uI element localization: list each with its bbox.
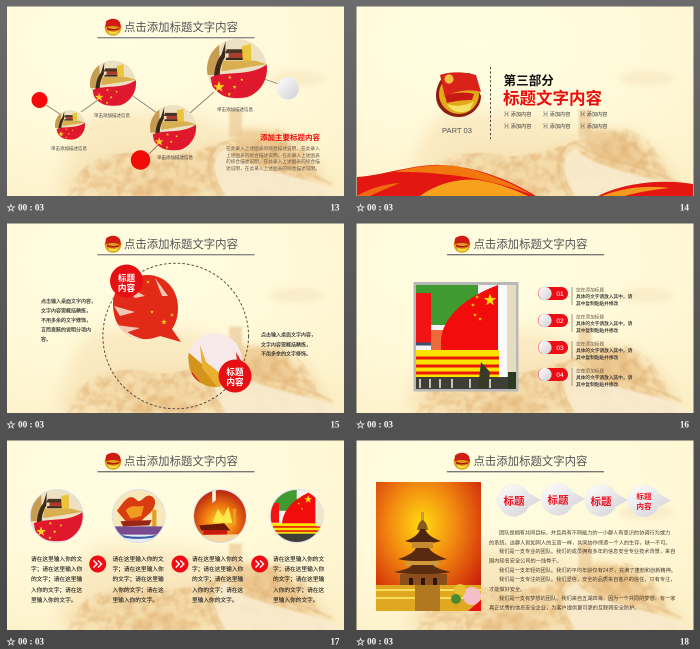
footer slide 16: 00 : 03	[367, 420, 393, 430]
left text block: 点击输入桌面文字内容，	[41, 298, 96, 305]
red badge top: 标题	[118, 272, 135, 283]
bubble 1	[498, 484, 541, 516]
arrow button 3	[251, 556, 268, 572]
toggle item 04: 您在添加标题	[576, 368, 604, 374]
toggle item 01	[538, 286, 633, 307]
footer slide 15: 15	[330, 420, 340, 430]
toggle item 02: 具体的文字请放入其中，请	[576, 320, 633, 327]
toggle item 01: 具体的文字请放入其中，请	[576, 293, 633, 300]
toggle item 04: 其中复制粘贴并修改	[576, 381, 619, 388]
toggle item 01: 其中复制粘贴并修改	[576, 300, 619, 307]
heading: slide 17 title: 点击添加标题文字内容	[124, 454, 238, 468]
step 3 text: 请在这里输入你的文	[192, 555, 243, 563]
step 2 text: 里输入你的文字。	[112, 596, 158, 604]
step 1 text: 请在这里输入你的文	[31, 555, 82, 563]
footer slide 13: 13	[330, 202, 340, 212]
team description text	[489, 528, 676, 612]
body text block: 述说明，在此录入上述图表的综合描述说明。	[226, 165, 320, 172]
body text block: 在此录入上述图表的综合描述说明，在此录入	[226, 145, 320, 152]
body text block: 的综合描述说明，在此录入上述图表的综合描	[226, 158, 320, 165]
heading: slide 18 title	[447, 453, 604, 472]
heading: slide 13 title: 点击添加标题文字内容	[124, 20, 238, 34]
dashed ring	[103, 263, 248, 409]
left text block: 不用多余的文字修饰，	[41, 317, 91, 324]
footer slide 15	[8, 420, 340, 430]
bubble 2: 标题	[548, 494, 569, 506]
ribbon right	[598, 182, 693, 196]
team description text: 的系统，这群人就如同人的五官一样，共同协作缔造一个人的生存，缺一不可。	[489, 538, 671, 546]
caption labels: 单击添加描述信息	[157, 154, 193, 161]
connector lines	[46, 79, 279, 155]
step 2 text	[112, 555, 164, 604]
footer slide 17: 00 : 03	[18, 636, 44, 646]
heading: slide 17 title	[98, 453, 254, 472]
flag photo in pin shape	[113, 275, 181, 342]
photo circle middle left	[90, 60, 137, 106]
bubble 3: 标题	[590, 495, 612, 508]
footer slide 17	[8, 636, 340, 646]
right text block: 文字内容需概括精炼，	[261, 342, 311, 348]
step 4 text: 里输入你的文字。	[273, 596, 318, 604]
step 4 text: 字；请在这里输入你	[273, 565, 324, 573]
step 3 text	[192, 555, 243, 604]
white and gold photo circle	[188, 333, 242, 388]
bubble 4	[628, 485, 671, 517]
section title heading: 标题文字内容	[503, 88, 602, 108]
left text block: 容。	[41, 336, 51, 343]
toggle item 04: 04	[556, 372, 564, 379]
team description text: 我们是一支专业的团队。我们的成员拥有多年的信息安全专业技术背景，来自	[499, 547, 675, 555]
footer slide 13	[8, 202, 340, 212]
toggle item 02: 您在添加标题	[576, 314, 604, 320]
heading: slide 18 title: 点击添加标题文字内容	[474, 454, 587, 468]
left text block: 言简意赅的说明分项内	[41, 326, 91, 334]
panel: slide 16 photo with list	[356, 224, 694, 430]
heading: slide 16 title	[447, 236, 604, 255]
toggle item 04	[538, 368, 633, 388]
photo circle large	[207, 39, 268, 99]
footer slide 14: 14	[680, 202, 689, 212]
footer slide 15: 00 : 03	[18, 420, 44, 430]
toggle item 01: 01	[556, 291, 564, 298]
right text block: 点击输入桌面文字内容，	[261, 332, 316, 338]
toggle item 01: 您在添加标题	[576, 286, 604, 294]
caption labels: 单击添加描述信息	[94, 112, 130, 119]
step 3 text: 的文字；请在这里输	[192, 575, 243, 583]
temple photo	[376, 482, 481, 611]
toggle item 03	[538, 340, 633, 361]
step 3 text: 入你的文字；请在这	[192, 586, 243, 594]
item list: ⌘ 添加内容	[580, 110, 607, 118]
item list: ⌘ 添加内容	[504, 122, 531, 130]
toggle item 03: 03	[556, 345, 564, 352]
heading: slide 15 title	[98, 236, 254, 255]
panel: slide 13 network of circles	[7, 6, 344, 212]
body text block: 上述图表的综合描述说明，在此录入上述图表	[226, 152, 320, 159]
step 2 text: 入你的文字；请在这	[112, 586, 164, 594]
step 1 text	[31, 555, 82, 604]
team description text: 我们是一支有梦想的团队。我们来自五湖四海，因为一个共同的梦想：有一家	[499, 594, 675, 602]
white knob circle	[277, 77, 299, 100]
item list	[504, 110, 607, 130]
red dot bottom	[131, 150, 150, 170]
step 1 text: 里输入你的文字。	[31, 596, 76, 604]
team description text: 团队是拥有共同目标，并且具有不同能力的一小群人有意识的协调行为或力	[499, 528, 670, 536]
footer slide 17: 17	[330, 636, 340, 646]
footer slide 18	[357, 636, 689, 646]
right text block	[261, 332, 316, 358]
toggle item 03: 您在添加标题	[576, 340, 604, 348]
footer slide 14: 00 : 03	[367, 202, 393, 212]
step 2 text: 请在这里输入你的文	[112, 555, 164, 563]
section number heading: 第三部分	[504, 73, 554, 88]
arrow button 1	[89, 556, 106, 572]
step 4 text	[273, 555, 324, 604]
part label: PART 03	[442, 126, 472, 135]
step 1 text: 入你的文字；请在这	[31, 586, 82, 594]
item list: ⌘ 添加内容	[543, 122, 570, 130]
team description text: 国内知名安全公司的一线骨干。	[489, 556, 562, 564]
emblem large	[436, 72, 481, 117]
toggle item 03: 其中复制粘贴并修改	[576, 354, 619, 361]
footer slide 14	[357, 202, 689, 212]
step 1 text: 字；请在这里输入你	[31, 565, 82, 573]
toggle item 03: 具体的文字请放入其中，请	[576, 347, 633, 354]
left text block	[41, 298, 96, 343]
item list: ⌘ 添加内容	[504, 110, 531, 118]
red subheading: 添加主要标题内容	[260, 132, 320, 142]
dashed divider	[490, 67, 492, 139]
team description text: 真正优秀的信息安全企业，为客户提供更可靠的互联网安全防护。	[489, 604, 639, 612]
toggle item 02: 02	[556, 318, 564, 325]
step 2 text: 字；请在这里输入你	[112, 565, 164, 573]
step 3 photo	[193, 489, 247, 543]
red badge bottom: 内容	[226, 376, 244, 387]
red badge top: 内容	[118, 282, 135, 293]
toggle list	[538, 286, 633, 388]
toggle item 02: 其中复制粘贴并修改	[576, 327, 619, 334]
team description text: 才能做好安全。	[489, 585, 525, 593]
framed flag photo	[414, 282, 518, 392]
caption labels	[51, 106, 253, 161]
bubble 4: 标题	[636, 491, 652, 501]
red badge bottom: 标题	[226, 366, 244, 377]
step 4 text: 的文字；请在这里输	[273, 575, 324, 583]
step 4 text: 请在这里输入你的文	[273, 555, 324, 563]
body text block	[226, 145, 320, 172]
step 2 text: 的文字；请在这里输	[112, 575, 164, 583]
team description text: 我们是一支专注的团队。我们坚信，安全的品质来自客户的信任，只有专注，	[499, 575, 675, 583]
bubble 3	[585, 484, 628, 516]
panel: slide 15 dashed circle	[7, 224, 344, 430]
heading: slide 13 title	[98, 19, 254, 38]
panel: slide 18 temple and team text	[356, 440, 694, 646]
photo circle small	[55, 110, 86, 140]
panel: slide 14 section cover	[356, 6, 694, 212]
step 4 photo	[270, 489, 324, 543]
toggle item 04: 具体的文字请放入其中，请	[576, 374, 633, 381]
step 2 photo	[112, 489, 166, 543]
step 1 photo	[30, 489, 84, 543]
arrow button 2	[172, 556, 188, 572]
red dot left	[32, 92, 48, 108]
item list: ⌘ 添加内容	[543, 110, 570, 118]
step 1 text: 的文字；请在这里输	[31, 575, 82, 583]
caption labels: 单击添加描述信息	[217, 106, 253, 113]
heading: slide 15 title: 点击添加标题文字内容	[124, 237, 238, 251]
heading: slide 16 title: 点击添加标题文字内容	[474, 237, 587, 251]
footer slide 18: 00 : 03	[367, 636, 393, 646]
step 3 text: 字；请在这里输入你	[192, 565, 243, 573]
bubble 4: 内容	[636, 501, 652, 511]
item list: ⌘ 添加内容	[580, 122, 607, 130]
right text block: 不用多余的文字修饰。	[261, 350, 311, 358]
footer slide 18: 18	[680, 636, 689, 646]
photo circle middle right	[150, 105, 197, 151]
bubble 1: 标题	[504, 494, 525, 508]
footer slide 16	[357, 420, 689, 430]
bubble 2	[542, 483, 585, 515]
ribbon left	[357, 165, 536, 196]
step 3 text: 里输入你的文字。	[192, 596, 238, 604]
caption labels: 单击添加描述信息	[51, 145, 87, 152]
step 4 text: 入你的文字；请在这	[273, 586, 324, 594]
toggle item 02	[538, 314, 633, 334]
left text block: 文字内容需概括精炼，	[41, 308, 91, 314]
panel: slide 17 four step process	[7, 440, 344, 646]
red badge top	[110, 264, 143, 298]
red badge bottom	[218, 360, 252, 392]
team description text: 我们是一支年轻的团队。我们的平均年龄仅有24岁，充满了蓬勃和创新精神。	[499, 566, 676, 574]
footer slide 13: 00 : 03	[18, 202, 44, 212]
footer slide 16: 16	[680, 420, 689, 430]
